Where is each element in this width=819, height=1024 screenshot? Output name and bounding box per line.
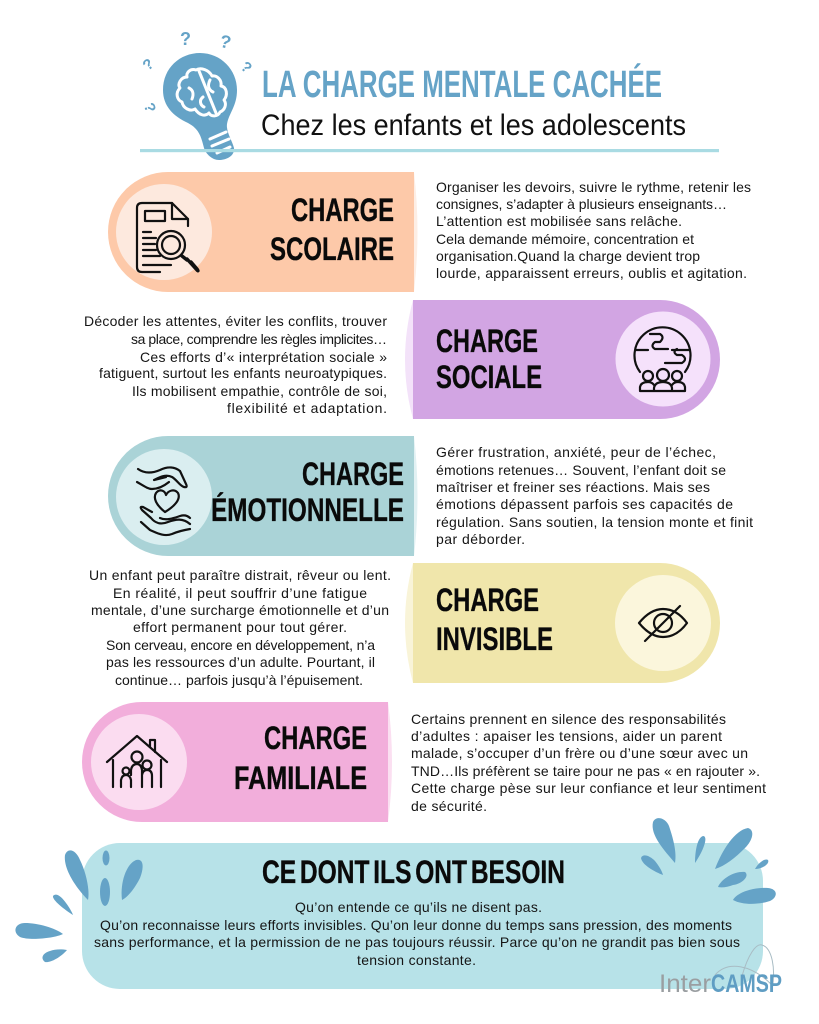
logo: InterCAMSP: Inter bbox=[659, 970, 711, 998]
icon: hands holding heart bbox=[137, 467, 190, 535]
text: charge émotionnelle: émotions retenues… Souvent, l’enfant doit se bbox=[436, 462, 726, 478]
icon: house with family bbox=[107, 736, 167, 787]
text: charge scolaire: consignes, s’adapter à plusieurs enseignants… bbox=[436, 196, 727, 212]
decoration: left splash bbox=[15, 850, 143, 962]
body text bbox=[94, 899, 740, 968]
panel: charge invisible bbox=[405, 563, 720, 683]
heading: CHARGE bbox=[264, 720, 367, 756]
text: charge émotionnelle: émotions dépassent parfois ses capacités de bbox=[436, 496, 733, 512]
panel: charge scolaire: SCOLAIRE bbox=[270, 231, 394, 267]
text: charge scolaire bbox=[436, 179, 751, 281]
panel: charge émotionnelle bbox=[108, 436, 418, 556]
icon: light bulb with brain: ? bbox=[140, 101, 159, 115]
icon: light bulb with brain bbox=[140, 29, 255, 160]
text: charge familiale: d’adultes : apaiser les tensions, aider un parent bbox=[411, 728, 722, 744]
text: charge émotionnelle: maîtriser et freiner ses réactions. Mais ses bbox=[436, 479, 710, 495]
text: charge sociale: Ils mobilisent empathie, contrôle de soi, bbox=[132, 383, 387, 399]
body text: tension constante. bbox=[357, 952, 476, 968]
text: charge familiale: Cette charge pèse sur leur confiance et leur sentiment bbox=[411, 780, 766, 796]
text: charge émotionnelle bbox=[436, 444, 753, 547]
heading: CHARGE bbox=[302, 456, 404, 492]
text: charge familiale: Certains prennent en silence des responsabilités bbox=[411, 711, 726, 727]
icon: light bulb with brain: ? bbox=[237, 58, 255, 77]
text: charge familiale: TND…Ils préfèrent se taire pour ne pas « en rajouter ». bbox=[411, 763, 760, 779]
text: charge sociale: flexibilité et adaptation. bbox=[227, 400, 387, 416]
heading: CHARGE bbox=[436, 323, 538, 359]
icon: document with magnifier bbox=[137, 203, 198, 272]
text: charge invisible: En réalité, il peut souffrir d’une fatigue bbox=[113, 585, 367, 601]
text: charge scolaire: lourde, apparaissent erreurs, oublis et agitation. bbox=[436, 265, 747, 281]
icon: crossed-out eye bbox=[639, 606, 687, 641]
decoration: right splash bbox=[641, 818, 776, 904]
panel: charge invisible: INVISIBLE bbox=[436, 621, 553, 657]
body text: Qu’on entende ce qu’ils ne disent pas. bbox=[295, 899, 542, 915]
icon: light bulb with brain: ? bbox=[180, 29, 191, 49]
header rule bbox=[140, 149, 719, 152]
body text: Qu’on reconnaisse leurs efforts invisibles. Qu’on leur donne du temps sans pression, des moments bbox=[100, 917, 732, 933]
heading: CHARGE bbox=[436, 582, 539, 618]
text: charge familiale bbox=[411, 711, 766, 814]
text: charge scolaire: Organiser les devoirs, suivre le rythme, retenir les bbox=[436, 179, 751, 195]
panel: charge sociale bbox=[405, 300, 720, 419]
icon: light bulb with brain: ? bbox=[140, 55, 158, 74]
text: charge invisible: Un enfant peut paraître distrait, rêveur ou lent. bbox=[89, 567, 391, 583]
text: charge émotionnelle: par déborder. bbox=[436, 531, 525, 547]
text: charge invisible: effort permanent pour tout gérer. bbox=[133, 619, 347, 635]
text: charge invisible: continue… parfois jusqu’à l’épuisement. bbox=[115, 672, 363, 688]
panel: ce dont ils ont besoin bbox=[82, 843, 763, 989]
panel: charge émotionnelle: ÉMOTIONNELLE bbox=[211, 492, 404, 528]
icon: globe with people bbox=[634, 327, 690, 391]
text: charge familiale: malade, s’occuper d’un frère ou d’une sœur avec un bbox=[411, 745, 748, 761]
panel: charge scolaire bbox=[108, 172, 418, 292]
logo: InterCAMSP: CAMSP bbox=[711, 970, 782, 998]
text: charge familiale: de sécurité. bbox=[411, 798, 487, 814]
text: charge sociale bbox=[84, 313, 387, 416]
heading: CE DONT ILS ONT BESOIN bbox=[262, 854, 565, 890]
panel: charge sociale: SOCIALE bbox=[436, 359, 542, 395]
text: charge sociale: fatiguent, surtout les enfants neuroatypiques. bbox=[99, 365, 387, 381]
text: charge émotionnelle: régulation. Sans soutien, la tension monte et finit bbox=[436, 514, 753, 530]
text: charge sociale: sa place, comprendre les règles implicites… bbox=[131, 331, 387, 347]
text: charge sociale: Décoder les attentes, éviter les conflits, trouver bbox=[84, 313, 387, 329]
text: charge émotionnelle: Gérer frustration, anxiété, peur de l’échec, bbox=[436, 444, 716, 460]
panel: charge familiale: FAMILIALE bbox=[234, 760, 367, 796]
text: charge invisible: Son cerveau, encore en développement, n’a bbox=[106, 637, 375, 653]
icon: light bulb with brain: ? bbox=[218, 31, 233, 53]
header bbox=[140, 29, 719, 160]
body text: sans performance, et la permission de ne pas toujours réussir. Parce qu’on ne grandit pas bien sous bbox=[94, 934, 740, 950]
text: charge sociale: Ces efforts d’« interprétation sociale » bbox=[140, 349, 387, 365]
subtitle: Chez les enfants et les adolescents bbox=[261, 109, 686, 142]
text: charge scolaire: L’attention est mobilisée sans relâche. bbox=[436, 213, 682, 229]
text: charge invisible: pas les ressources d’un adulte. Pourtant, il bbox=[106, 654, 375, 670]
panel: charge familiale bbox=[82, 702, 392, 822]
logo: InterCAMSP bbox=[659, 945, 782, 998]
heading: CHARGE bbox=[291, 192, 394, 228]
text: charge scolaire: organisation.Quand la charge devient trop bbox=[436, 248, 700, 264]
text: charge invisible bbox=[89, 567, 391, 688]
text: charge scolaire: Cela demande mémoire, concentration et bbox=[436, 231, 694, 247]
text: charge invisible: mentale, d’une surcharge émotionnelle et d’un bbox=[91, 602, 389, 618]
